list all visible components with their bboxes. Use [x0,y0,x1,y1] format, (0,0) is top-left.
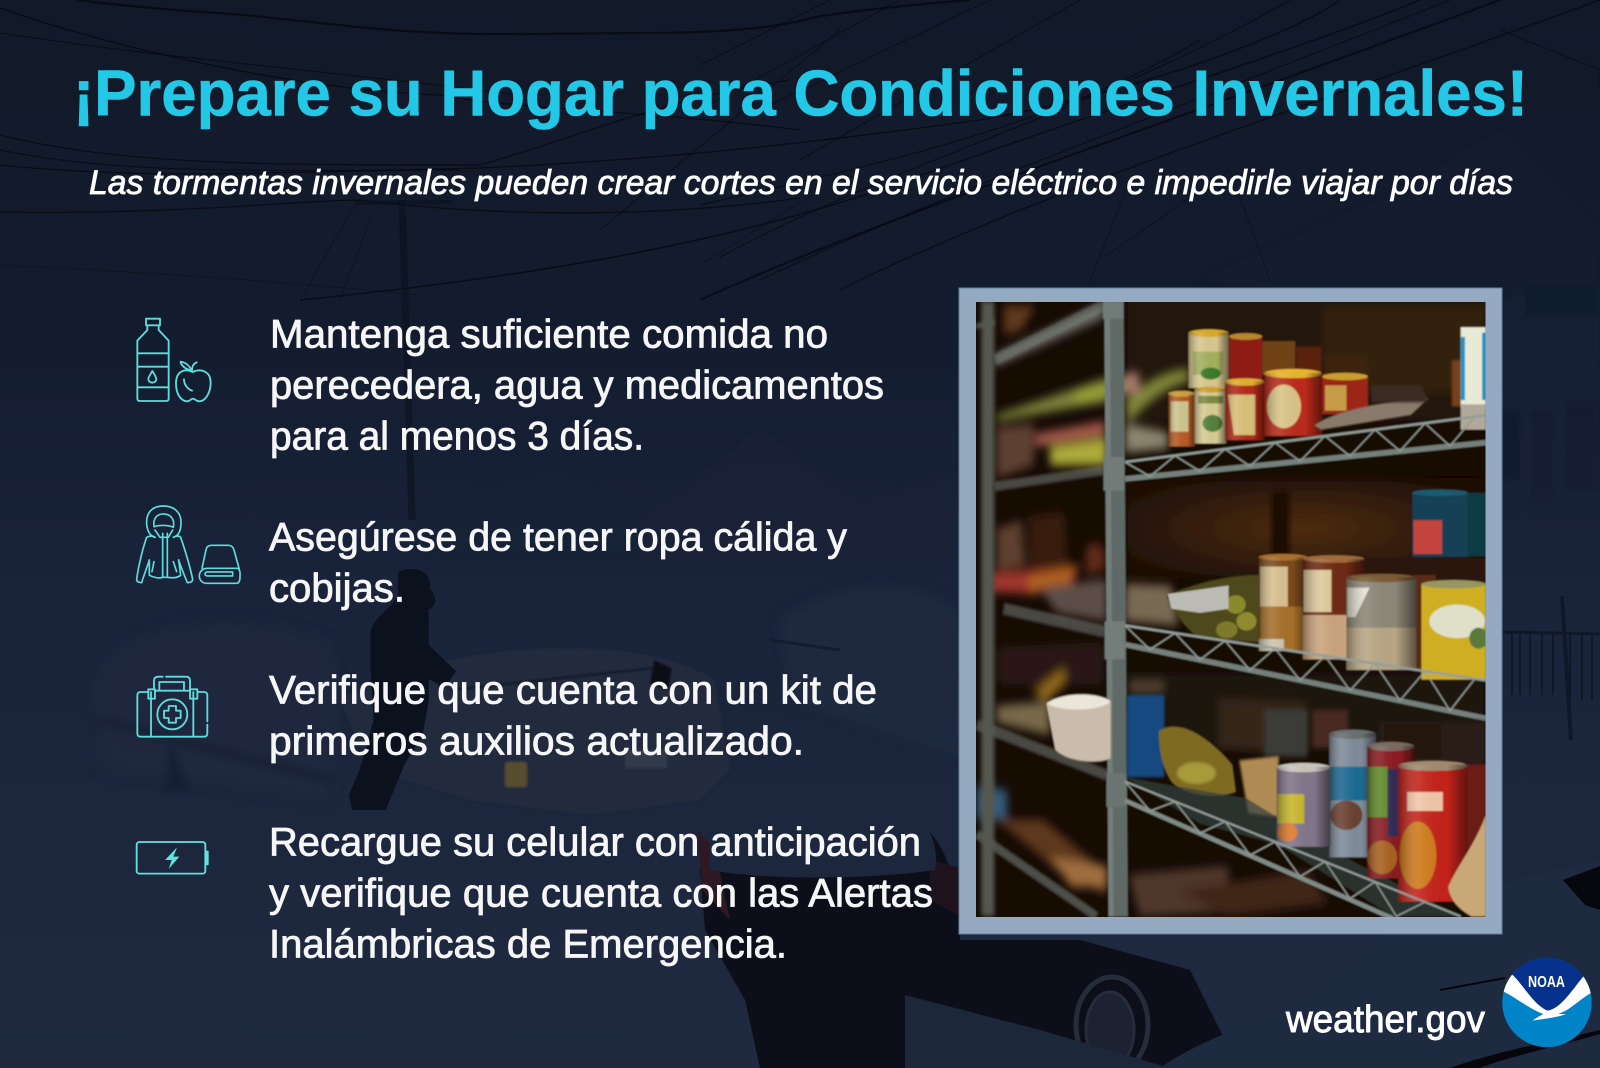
text: food, water, medicine: para al menos 3 días. [270,414,644,458]
icon: jacket and blanket [137,506,240,583]
background: dark strip right [1563,866,1600,910]
logo: NOAA: NOAA [1528,974,1565,991]
photo: wire shelves left, blurred [976,305,1107,916]
photo: rear upright [981,301,994,916]
text: phone and alerts [269,820,933,966]
background: houses [430,130,1600,560]
title: ¡Prepare su Hogar para Condiciones Invernales! [73,56,1528,130]
background: snow drifts and left car [95,585,970,800]
photo: bottom shelf goods [1046,695,1486,817]
text: food, water, medicine: Mantenga suficiente comida no [270,312,828,356]
photo: shelf two [1125,626,1486,718]
footer: weather.gov: weather.gov [1285,999,1485,1041]
background: power wires and pole [0,0,1600,520]
text: warm clothing: Asegúrese de tener ropa cálida y [269,516,847,560]
text: warm clothing [269,516,847,610]
logo: NOAA [1500,955,1594,1047]
icon: first aid kit [137,677,207,737]
photo: front upright [1103,301,1128,916]
text: phone and alerts: Inalámbricas de Emergencia. [269,922,787,966]
photo: shelf three floor [1125,777,1461,916]
text: first aid: primeros auxilios actualizado. [269,720,804,764]
background: tyre [1076,977,1148,1068]
subtitle: Las tormentas invernales pueden crear cortes en el servicio eléctrico e impedirle viajar por días [89,164,1513,202]
photo: bottom shelf cans [1277,725,1486,916]
photo: shelf three [1125,781,1461,918]
text: phone and alerts: y verifique que cuenta con las Alertas [269,872,933,916]
text: first aid: Verifique que cuenta con un kit de [269,668,877,712]
icon: water bottle and apple [137,319,211,401]
photo: dark backdrop [971,297,1493,925]
text: phone and alerts: Recargue su celular con anticipación [269,820,921,864]
text: food, water, medicine: perecedera, agua y medicamentos [270,364,884,408]
photo: top shelf cans [1168,329,1368,446]
text: warm clothing: cobijas. [269,566,405,610]
text: food, water, medicine [270,312,884,458]
background: centre car in snow [340,648,730,815]
icon: battery [137,842,209,874]
photo: top shelf bag and box [1314,327,1486,430]
background: dark car in foreground [695,788,1600,1068]
panel: photo frame [959,288,1502,934]
photo: middle shelf goods [1166,489,1488,679]
background: fence at right [1502,596,1600,740]
text: first aid [269,668,877,764]
background: person silhouette [349,569,456,810]
photo: pantry shelves with canned food [971,297,1493,925]
photo: blurred left side goods [977,303,1329,916]
photo: shelf one [1125,415,1486,479]
